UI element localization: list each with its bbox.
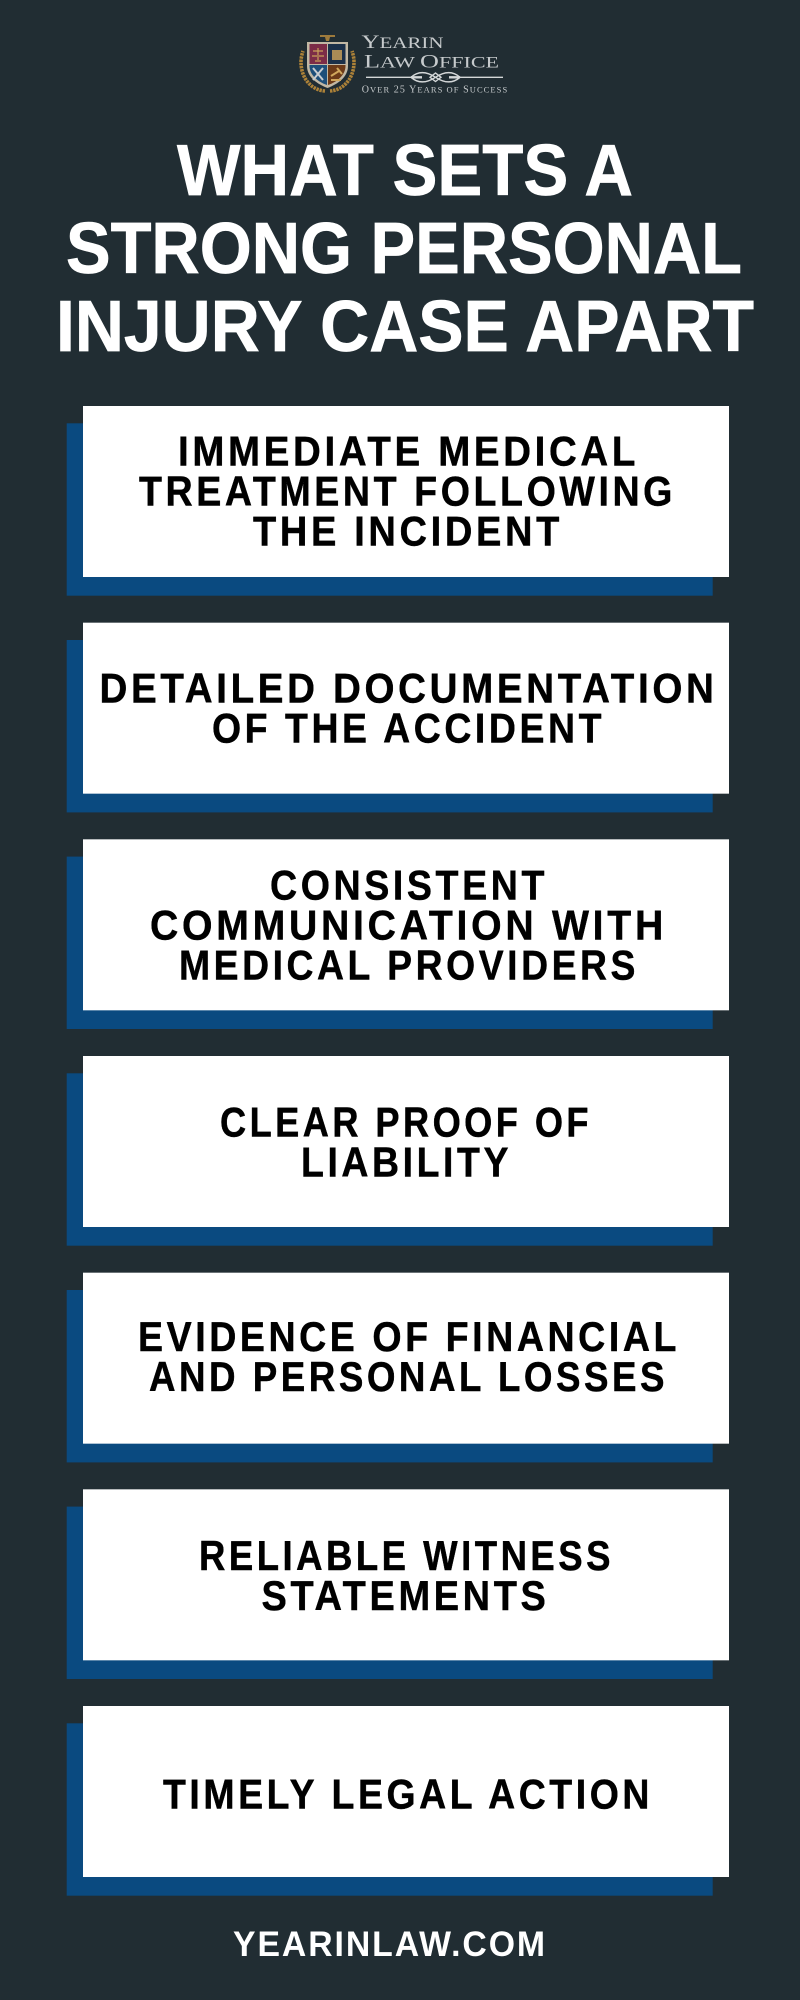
card text: TIMELY LEGAL ACTION — [163, 1770, 653, 1817]
logo tagline: OVER 25 YEARS OF SUCCESS — [362, 85, 508, 96]
card text: RELIABLE WITNESS — [199, 1532, 614, 1579]
panel card — [83, 1489, 729, 1660]
card text: CONSISTENT — [270, 862, 548, 908]
card text — [100, 665, 718, 752]
logo: Yearin Law Office — [301, 32, 508, 96]
card text — [199, 1532, 614, 1619]
panel card — [83, 1706, 729, 1877]
card text: MEDICAL PROVIDERS — [179, 942, 639, 988]
panel shadow — [67, 1290, 713, 1462]
icon: crest crown — [320, 35, 335, 41]
panel shadow — [67, 857, 713, 1029]
panel: reliable witness statements — [67, 1489, 729, 1679]
panel: immediate medical treatment — [67, 406, 729, 596]
panel shadow — [67, 1507, 713, 1679]
card text — [220, 1099, 592, 1186]
panel: consistent communication — [67, 839, 729, 1029]
card text — [138, 1313, 680, 1400]
card text: CLEAR PROOF OF — [220, 1099, 592, 1146]
panel shadow — [67, 640, 713, 812]
panel shadow — [67, 423, 713, 596]
panel: clear proof of liability — [67, 1056, 729, 1246]
panel card — [83, 1056, 729, 1227]
panel shadow — [67, 1073, 713, 1246]
card text: STATEMENTS — [262, 1572, 550, 1619]
footer url: YEARINLAW.COM — [233, 1925, 547, 1964]
card text — [150, 862, 667, 988]
card text: OF THE ACCIDENT — [212, 705, 605, 752]
card text: EVIDENCE OF FINANCIAL — [138, 1313, 680, 1360]
logo wordmark: Yearin: Y EARIN — [362, 32, 444, 53]
panel: detailed documentation — [67, 623, 729, 812]
card text: DETAILED DOCUMENTATION — [100, 665, 718, 712]
panel card — [83, 406, 729, 577]
panel card — [83, 623, 729, 794]
logo ornament divider — [366, 73, 503, 82]
panel card — [83, 839, 729, 1010]
logo wordmark: Law Office: L AW O FFICE — [364, 52, 499, 73]
panel: evidence of losses — [67, 1273, 729, 1462]
title: INJURY CASE APART — [56, 287, 754, 367]
card text — [139, 428, 676, 555]
title: WHAT SETS A — [177, 131, 633, 211]
icon: shield — [307, 42, 348, 88]
icon: laurel wreath — [301, 51, 354, 91]
card text: LIABILITY — [301, 1139, 512, 1186]
panel shadow — [67, 1723, 713, 1896]
card text: COMMUNICATION WITH — [150, 902, 667, 948]
panel card — [83, 1273, 729, 1444]
card text: IMMEDIATE MEDICAL — [178, 428, 639, 475]
title: STRONG PERSONAL — [66, 209, 742, 289]
panel: timely legal action — [67, 1706, 729, 1896]
card text: TREATMENT FOLLOWING — [139, 468, 676, 515]
card text: AND PERSONAL LOSSES — [149, 1353, 668, 1400]
title — [56, 131, 754, 367]
card text: THE INCIDENT — [253, 508, 563, 555]
